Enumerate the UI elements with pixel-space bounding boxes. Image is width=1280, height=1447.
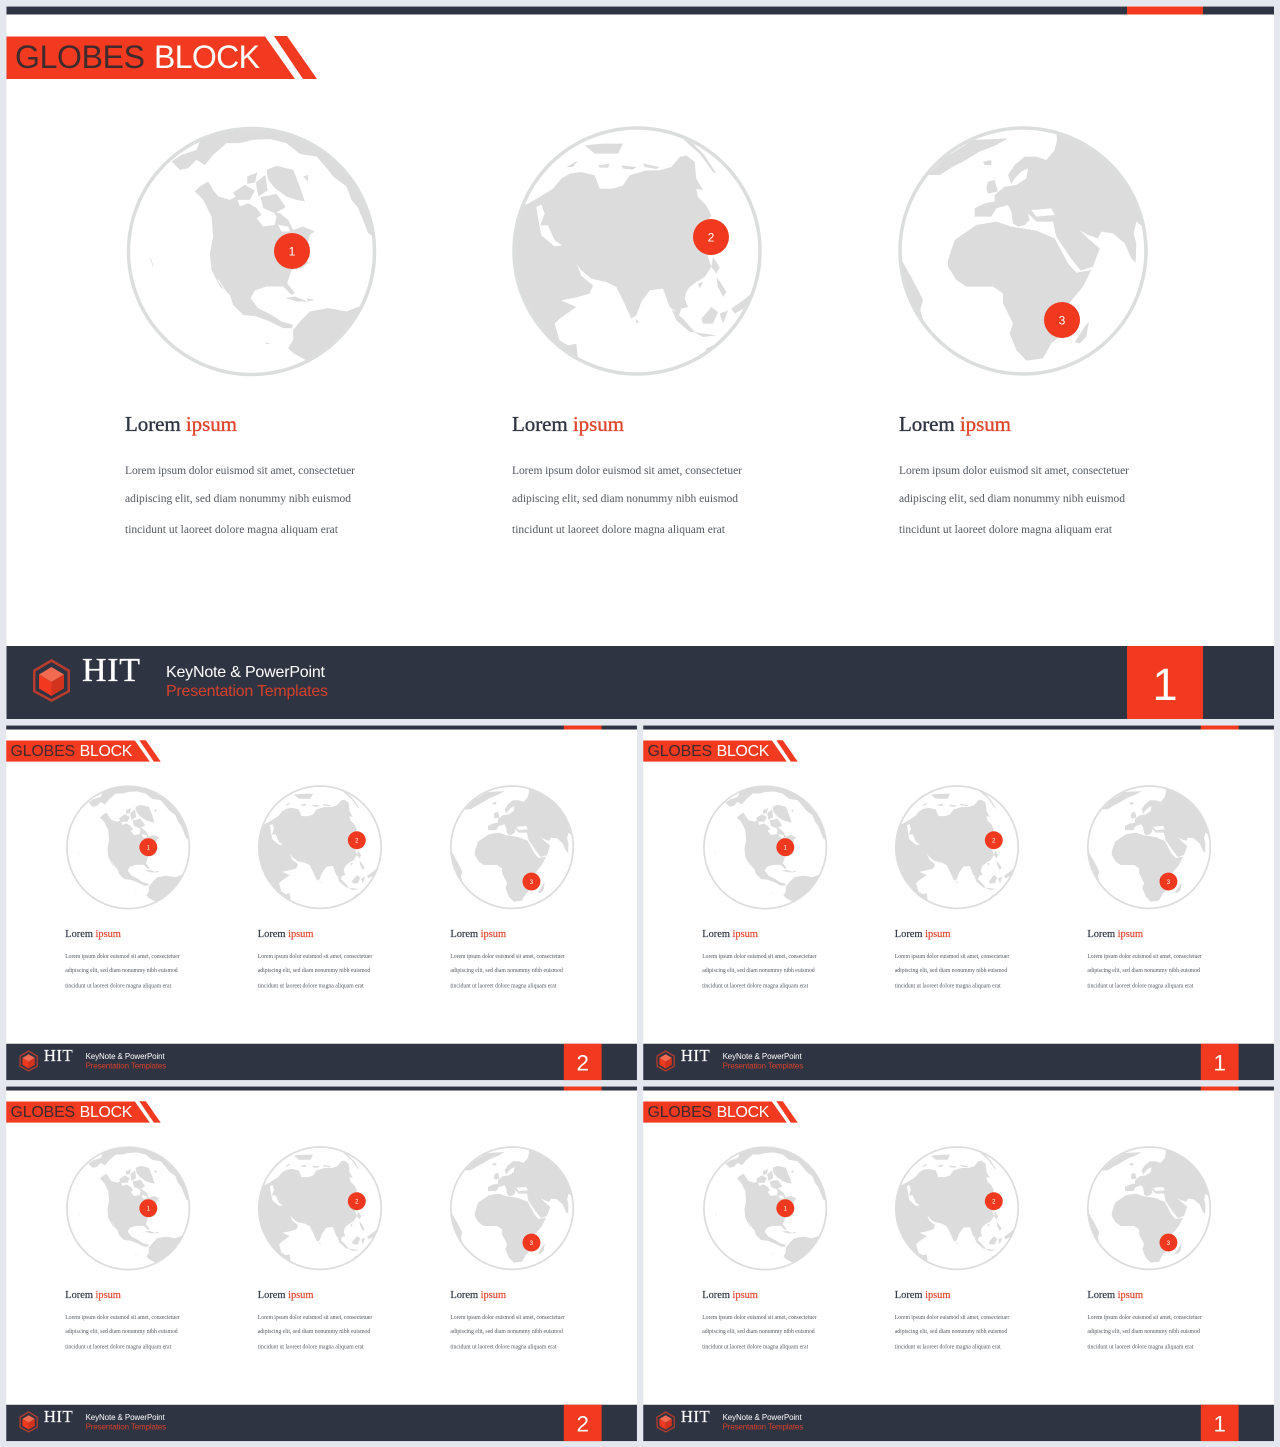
panel: small slide top right xyxy=(643,725,1274,1080)
text block 2: Lorem ipsum dolor euismod sit amet, consectetuer xyxy=(258,1315,372,1321)
footer bar: Presentation Templates xyxy=(86,1062,166,1071)
title banner xyxy=(6,1101,161,1123)
globe 2: Asia: 2 xyxy=(708,230,715,244)
title banner: BLOCK xyxy=(80,743,133,760)
title banner xyxy=(643,740,798,762)
text block 1: Lorem ipsum dolor euismod sit amet, consectetuer xyxy=(125,465,355,477)
globe 2: Asia xyxy=(490,128,766,380)
globe 2: 2 xyxy=(355,838,359,844)
text block 1: tincidunt ut laoreet dolore magna aliquam erat xyxy=(702,984,809,990)
text block 3: adipiscing elit, sed diam nonummy nibh euismod xyxy=(450,968,563,974)
top accent tab xyxy=(1201,1087,1239,1091)
text block 3: Lorem ipsum xyxy=(450,1290,506,1301)
globe 1 xyxy=(704,1145,829,1270)
title banner: GLOBES xyxy=(15,39,145,75)
text block 2: tincidunt ut laoreet dolore magna aliquam erat xyxy=(512,524,726,536)
footer bar: Presentation Templates xyxy=(723,1423,803,1432)
globe 3: 3 xyxy=(530,880,534,886)
icon: hexagon cube logo xyxy=(656,1411,675,1433)
page number xyxy=(564,1044,602,1080)
footer bar xyxy=(6,1405,637,1441)
globe 3: Africa xyxy=(880,123,1180,377)
globe 3 xyxy=(1078,1145,1227,1271)
text block 2: Lorem ipsum dolor euismod sit amet, consectetuer xyxy=(895,1315,1009,1321)
footer bar xyxy=(643,1044,1274,1080)
globe 3: 3 xyxy=(1167,880,1171,886)
text block 1: Lorem ipsum xyxy=(65,929,121,940)
page number xyxy=(1201,1044,1239,1080)
text block 3: tincidunt ut laoreet dolore magna aliquam erat xyxy=(1087,984,1194,990)
page number: 1 xyxy=(1213,1412,1226,1437)
text block 1: tincidunt ut laoreet dolore magna aliquam erat xyxy=(65,1345,172,1351)
text block 3 xyxy=(450,1290,565,1351)
text block 3: tincidunt ut laoreet dolore magna aliquam erat xyxy=(899,524,1113,536)
footer bar: HIT xyxy=(44,1046,73,1065)
text block 1: Lorem ipsum xyxy=(65,1290,121,1301)
text block 1: Lorem ipsum dolor euismod sit amet, consectetuer xyxy=(702,1315,817,1321)
text block 2: tincidunt ut laoreet dolore magna aliquam erat xyxy=(258,984,364,990)
title banner: BLOCK xyxy=(717,743,770,760)
title banner: BLOCK xyxy=(154,39,260,75)
text block 3: Lorem ipsum xyxy=(450,929,506,940)
text block 3 xyxy=(899,412,1129,536)
globe 1: 1 xyxy=(147,1206,151,1212)
text block 1 xyxy=(65,1290,180,1351)
text block 3 xyxy=(450,929,565,990)
globe 1 xyxy=(67,784,192,909)
footer bar: KeyNote & PowerPoint xyxy=(86,1052,166,1061)
globe 2: 2 xyxy=(992,838,996,844)
top accent tab xyxy=(564,1087,602,1091)
globe 1: 1 xyxy=(784,845,788,851)
footer bar xyxy=(6,646,1274,719)
text block 3: Lorem ipsum xyxy=(899,412,1011,436)
footer bar: KeyNote & PowerPoint xyxy=(86,1413,166,1422)
text block 2: adipiscing elit, sed diam nonummy nibh euismod xyxy=(512,493,738,505)
footer bar: Presentation Templates xyxy=(723,1062,803,1071)
globe 1 xyxy=(704,784,829,909)
text block 1: Lorem ipsum dolor euismod sit amet, consectetuer xyxy=(702,954,817,960)
text block 1: adipiscing elit, sed diam nonummy nibh euismod xyxy=(65,968,178,974)
panel: small slide bottom right xyxy=(643,1086,1274,1441)
text block 3: Lorem ipsum dolor euismod sit amet, consectetuer xyxy=(899,465,1129,477)
text block 1: Lorem ipsum xyxy=(125,412,237,436)
text block 2: Lorem ipsum xyxy=(895,929,951,940)
text block 2 xyxy=(895,1290,1009,1351)
text block 1 xyxy=(65,929,180,990)
text block 2: tincidunt ut laoreet dolore magna aliquam erat xyxy=(258,1345,364,1351)
text block 1: tincidunt ut laoreet dolore magna aliquam erat xyxy=(65,984,172,990)
text block 1: adipiscing elit, sed diam nonummy nibh euismod xyxy=(702,1329,815,1335)
title banner: BLOCK xyxy=(80,1104,133,1121)
title banner xyxy=(643,1101,798,1123)
text block 2 xyxy=(258,929,372,990)
page number: 2 xyxy=(576,1412,589,1437)
icon: hexagon cube logo xyxy=(33,659,70,702)
globe 3 xyxy=(1078,784,1227,910)
panel: small slide bottom left xyxy=(6,1086,637,1441)
page number: 1 xyxy=(1213,1051,1226,1076)
title banner: GLOBES xyxy=(647,1104,712,1121)
text block 1: Lorem ipsum dolor euismod sit amet, consectetuer xyxy=(65,1315,180,1321)
text block 2: adipiscing elit, sed diam nonummy nibh euismod xyxy=(258,1329,370,1335)
icon: hexagon cube logo xyxy=(656,1050,675,1072)
text block 3: Lorem ipsum dolor euismod sit amet, consectetuer xyxy=(1087,954,1202,960)
text block 1 xyxy=(125,412,355,536)
footer bar: HIT xyxy=(44,1407,73,1426)
text block 2: Lorem ipsum dolor euismod sit amet, consectetuer xyxy=(512,465,742,477)
top accent tab xyxy=(1201,726,1239,730)
icon: hexagon cube logo xyxy=(19,1411,38,1433)
text block 1: tincidunt ut laoreet dolore magna aliquam erat xyxy=(702,1345,809,1351)
page number: 1 xyxy=(1152,659,1178,710)
globe 3: 3 xyxy=(1167,1241,1171,1247)
globe 1: 1 xyxy=(784,1206,788,1212)
text block 1: adipiscing elit, sed diam nonummy nibh euismod xyxy=(65,1329,178,1335)
globe 2 xyxy=(247,1147,384,1273)
footer bar xyxy=(6,1044,637,1080)
footer bar xyxy=(643,1405,1274,1441)
text block 3: adipiscing elit, sed diam nonummy nibh euismod xyxy=(1087,1329,1200,1335)
globe 2: 2 xyxy=(355,1199,359,1205)
text block 3 xyxy=(1087,929,1202,990)
text block 2: Lorem ipsum xyxy=(512,412,624,436)
top accent tab xyxy=(564,726,602,730)
footer bar: Presentation Templates xyxy=(166,683,328,700)
title banner xyxy=(6,36,317,79)
text block 2: Lorem ipsum dolor euismod sit amet, consectetuer xyxy=(895,954,1009,960)
globe 1: Americas: 1 xyxy=(289,244,296,258)
globe 1 xyxy=(67,1145,192,1270)
panel: small slide top left xyxy=(6,725,637,1080)
text block 3: Lorem ipsum dolor euismod sit amet, consectetuer xyxy=(450,954,565,960)
text block 3: Lorem ipsum dolor euismod sit amet, consectetuer xyxy=(1087,1315,1202,1321)
text block 2: tincidunt ut laoreet dolore magna aliquam erat xyxy=(895,984,1001,990)
text block 1: adipiscing elit, sed diam nonummy nibh euismod xyxy=(125,493,351,505)
text block 3 xyxy=(1087,1290,1202,1351)
text block 1: tincidunt ut laoreet dolore magna aliquam erat xyxy=(125,524,339,536)
text block 3: Lorem ipsum xyxy=(1087,1290,1143,1301)
top accent tab xyxy=(1127,6,1203,14)
text block 2 xyxy=(895,929,1009,990)
text block 3: Lorem ipsum dolor euismod sit amet, consectetuer xyxy=(450,1315,565,1321)
text block 2 xyxy=(512,412,742,536)
text block 2: adipiscing elit, sed diam nonummy nibh euismod xyxy=(258,968,370,974)
text block 2: adipiscing elit, sed diam nonummy nibh euismod xyxy=(895,1329,1007,1335)
icon: hexagon cube logo xyxy=(19,1050,38,1072)
text block 2: Lorem ipsum xyxy=(258,1290,314,1301)
text block 1 xyxy=(702,929,817,990)
text block 2 xyxy=(258,1290,372,1351)
globe 2 xyxy=(884,1147,1021,1273)
globe 3: Africa: 3 xyxy=(1059,314,1066,328)
globe 2 xyxy=(247,786,384,912)
footer bar: HIT xyxy=(681,1046,710,1065)
footer bar: KeyNote & PowerPoint xyxy=(723,1052,803,1061)
text block 2: Lorem ipsum dolor euismod sit amet, consectetuer xyxy=(258,954,372,960)
text block 3: adipiscing elit, sed diam nonummy nibh euismod xyxy=(450,1329,563,1335)
page number xyxy=(1127,646,1203,719)
footer bar: HIT xyxy=(681,1407,710,1426)
footer bar: Presentation Templates xyxy=(86,1423,166,1432)
text block 1: adipiscing elit, sed diam nonummy nibh euismod xyxy=(702,968,815,974)
globe 3 xyxy=(441,1145,590,1271)
footer bar: KeyNote & PowerPoint xyxy=(166,664,326,681)
title banner: BLOCK xyxy=(717,1104,770,1121)
globe 1: 1 xyxy=(147,845,151,851)
text block 2: Lorem ipsum xyxy=(895,1290,951,1301)
text block 2: Lorem ipsum xyxy=(258,929,314,940)
title banner: GLOBES xyxy=(10,743,75,760)
page number xyxy=(564,1405,602,1441)
text block 3: adipiscing elit, sed diam nonummy nibh euismod xyxy=(899,493,1125,505)
footer bar: HIT xyxy=(82,652,140,689)
page number xyxy=(1201,1405,1239,1441)
text block 3: tincidunt ut laoreet dolore magna aliquam erat xyxy=(450,984,557,990)
text block 1: Lorem ipsum xyxy=(702,929,758,940)
text block 3: Lorem ipsum xyxy=(1087,929,1143,940)
text block 1: Lorem ipsum xyxy=(702,1290,758,1301)
globe 3: 3 xyxy=(530,1241,534,1247)
title banner: GLOBES xyxy=(10,1104,75,1121)
title banner xyxy=(6,740,161,762)
footer bar: KeyNote & PowerPoint xyxy=(723,1413,803,1422)
text block 3: adipiscing elit, sed diam nonummy nibh euismod xyxy=(1087,968,1200,974)
text block 3: tincidunt ut laoreet dolore magna aliquam erat xyxy=(450,1345,557,1351)
text block 2: adipiscing elit, sed diam nonummy nibh euismod xyxy=(895,968,1007,974)
page number: 2 xyxy=(576,1051,589,1076)
globe 3 xyxy=(441,784,590,910)
text block 2: tincidunt ut laoreet dolore magna aliquam erat xyxy=(895,1345,1001,1351)
text block 1: Lorem ipsum dolor euismod sit amet, consectetuer xyxy=(65,954,180,960)
text block 1 xyxy=(702,1290,817,1351)
text block 3: tincidunt ut laoreet dolore magna aliquam erat xyxy=(1087,1345,1194,1351)
panel: main slide 1 xyxy=(6,6,1274,719)
globe 2 xyxy=(884,786,1021,912)
globe 2: 2 xyxy=(992,1199,996,1205)
globe 1: Americas xyxy=(128,125,380,374)
title banner: GLOBES xyxy=(647,743,712,760)
